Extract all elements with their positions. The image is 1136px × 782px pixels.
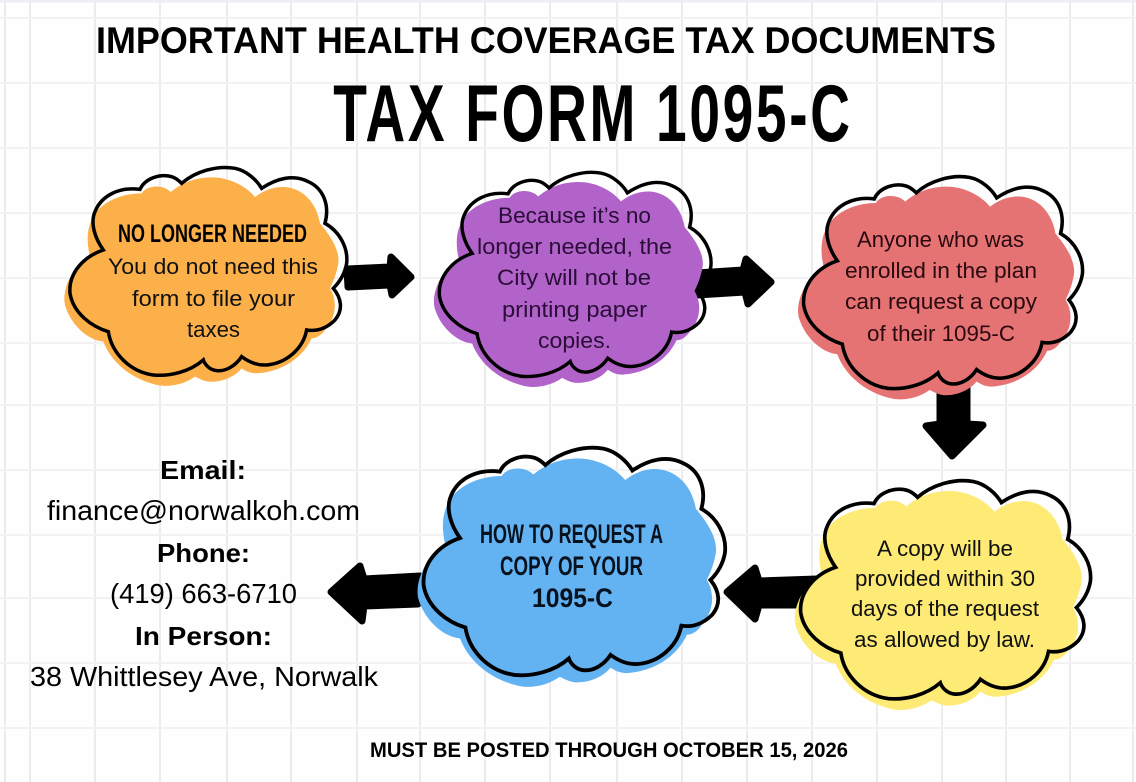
cloud text: copy provided within 30 days: provided within 30 bbox=[855, 566, 1035, 591]
footer note: posting date: MUST BE POSTED THROUGH OCTOBER 15, 2026 bbox=[370, 739, 848, 762]
text block: contact details: 38 Whittlesey Ave, Norwalk bbox=[30, 661, 379, 692]
text block: contact details: In Person: bbox=[135, 621, 272, 651]
text block: contact details: finance@norwalkoh.com bbox=[47, 495, 360, 526]
cloud text: you do not need this form: taxes bbox=[187, 317, 240, 342]
cloud text: copy provided within 30 days: days of the request bbox=[851, 596, 1039, 621]
cloud text: copy provided within 30 days bbox=[851, 536, 1039, 652]
cloud heading: how to request a copy of your 1095-C: 1095-C bbox=[532, 583, 613, 613]
text block: contact details: (419) 663-6710 bbox=[110, 578, 297, 609]
cloud text: you do not need this form bbox=[108, 254, 318, 342]
cloud text: anyone enrolled can request a copy: of their 1095-C bbox=[867, 321, 1015, 346]
cloud text: anyone enrolled can request a copy: can request a copy bbox=[845, 289, 1037, 314]
panel: how to request cloud bbox=[418, 448, 725, 687]
cloud text: city will not print paper copies: Because it’s no bbox=[498, 203, 651, 228]
arrow: orange to purple bbox=[347, 257, 411, 295]
text block: contact details bbox=[30, 455, 379, 692]
arrow: yellow to blue bbox=[727, 568, 817, 619]
cloud heading: no longer needed: NO LONGER NEEDED bbox=[118, 220, 307, 248]
panel: within 30 days cloud bbox=[795, 481, 1091, 710]
cloud text: anyone enrolled can request a copy: enrolled in the plan bbox=[845, 258, 1037, 283]
cloud text: copy provided within 30 days: A copy will be bbox=[877, 536, 1013, 561]
cloud text: you do not need this form: form to file your bbox=[132, 286, 295, 311]
heading: tax form 1095-C: TAX FORM 1095-C bbox=[333, 67, 850, 159]
cloud text: city will not print paper copies: printing paper bbox=[502, 297, 647, 322]
panel: no longer needed cloud bbox=[64, 167, 347, 386]
cloud text: copy provided within 30 days: as allowed by law. bbox=[854, 627, 1035, 652]
text block: contact details: Phone: bbox=[157, 538, 250, 568]
cloud text: city will not print paper copies: longer needed, the bbox=[477, 234, 672, 259]
arrow: red to yellow bbox=[926, 377, 983, 456]
cloud text: city will not print paper copies: City will not be bbox=[497, 265, 651, 290]
arrow: blue to contact details bbox=[331, 566, 420, 621]
cloud text: city will not print paper copies bbox=[477, 203, 672, 353]
panel: paper copies cloud bbox=[434, 172, 711, 387]
panel: request a copy cloud bbox=[798, 177, 1083, 399]
title: important health coverage tax documents: IMPORTANT HEALTH COVERAGE TAX DOCUMENTS bbox=[96, 20, 996, 61]
cloud heading: how to request a copy of your 1095-C: HOW TO REQUEST A bbox=[480, 519, 663, 549]
cloud text: anyone enrolled can request a copy: Anyone who was bbox=[857, 227, 1024, 252]
cloud text: anyone enrolled can request a copy bbox=[845, 227, 1037, 346]
cloud heading: how to request a copy of your 1095-C bbox=[480, 519, 663, 613]
arrow: purple to red bbox=[697, 259, 771, 304]
text block: contact details: Email: bbox=[160, 455, 246, 485]
cloud text: you do not need this form: You do not need this bbox=[108, 254, 318, 279]
cloud text: city will not print paper copies: copies. bbox=[538, 328, 611, 353]
cloud heading: how to request a copy of your 1095-C: COPY OF YOUR bbox=[500, 551, 643, 581]
